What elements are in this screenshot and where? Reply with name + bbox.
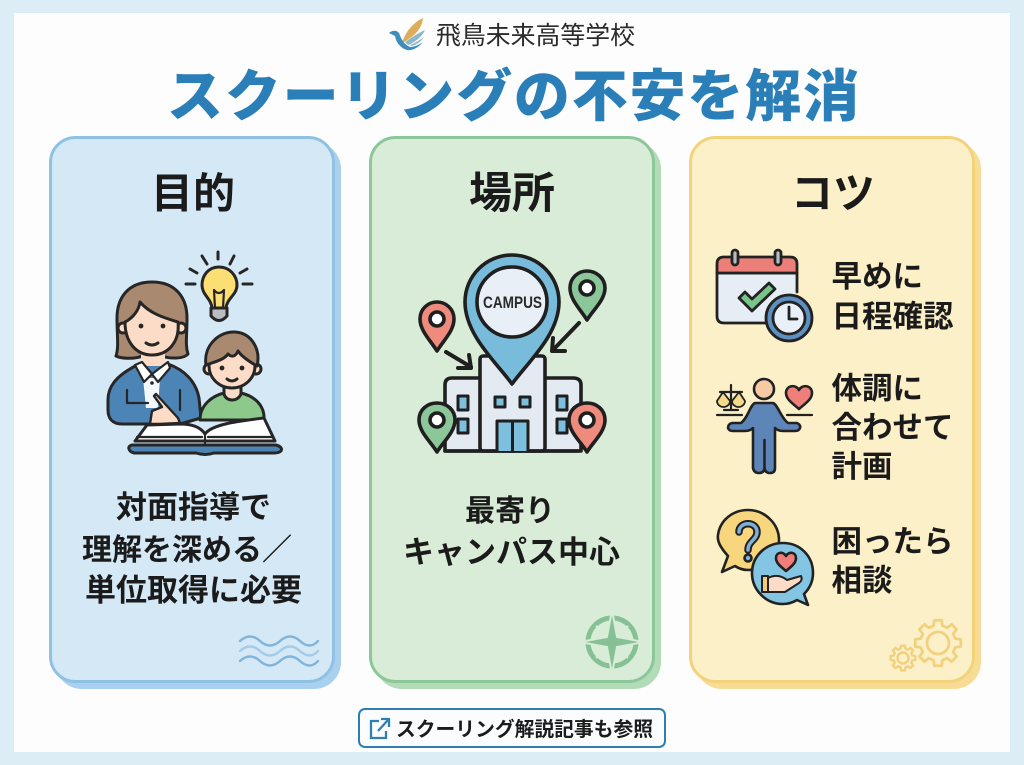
button: related article link: スクーリング解説記事も参照 [396,717,653,741]
decoration: waves [240,636,318,666]
text: location description: 最寄り [465,495,555,528]
text: location description: キャンパス中心 [403,535,620,570]
text: purpose description: 対面指導で [116,490,271,525]
open book [129,418,281,454]
arrow: from right pin [552,323,579,351]
pin: red left [420,302,454,351]
pin: green lower left [419,403,455,452]
button: related article link [359,709,665,747]
text: location description [403,495,620,570]
logo: school name with bird: 飛鳥未来高等学校 [436,22,635,50]
text: plan according to health: 合わせて [832,411,954,445]
icon: calendar and clock [717,250,812,341]
decoration: compass [580,610,644,674]
icon: speech bubbles [718,510,813,605]
text: plan according to health: 計画 [832,450,892,484]
icon: external link [371,719,389,738]
icon: balance person [717,379,812,473]
child [200,332,264,420]
text: check schedule early [832,260,954,334]
panel: purpose [50,138,341,689]
text: consult if in trouble: 困ったら [832,525,954,559]
arrow: from left pin [446,352,471,368]
building [445,356,581,451]
text: check schedule early: 日程確認 [832,300,954,334]
teacher [108,282,201,424]
text: plan according to health [832,372,954,484]
main pin: CAMPUS: CAMPUS [483,293,542,312]
illustration: teacher and child with book [108,252,281,454]
heading: location: 場所 [469,170,555,218]
title: スクーリングの不安を解消 [167,65,859,128]
icon: light bulb [186,252,252,320]
text: plan according to health: 体調に [832,372,923,406]
pin: green right [570,271,605,320]
text: check schedule early: 早めに [832,260,923,294]
panel: tips [690,138,981,689]
panel: location [370,138,661,689]
heading: tips: コツ [791,170,875,217]
decoration: gears [891,620,961,670]
text: purpose description: 単位取得に必要 [85,573,302,608]
text: consult if in trouble [832,525,954,598]
icon: bird [389,18,425,50]
main pin: CAMPUS [465,255,559,384]
illustration: campus building and pins [419,255,605,452]
heading: purpose: 目的 [151,170,235,217]
text: purpose description [82,490,302,608]
text: purpose description: 理解を深める／ [82,534,292,567]
text: consult if in trouble: 相談 [832,564,892,598]
pin: red lower right [569,403,605,452]
